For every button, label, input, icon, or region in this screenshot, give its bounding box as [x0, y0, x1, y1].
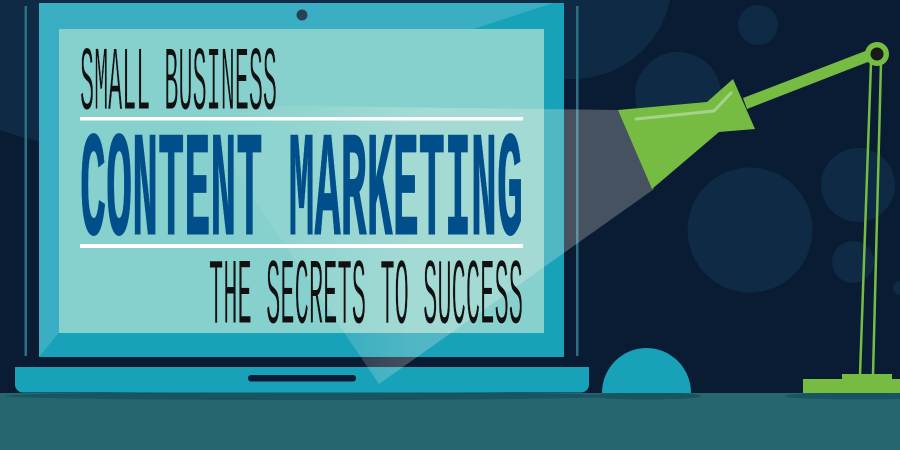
screen panel [59, 29, 544, 333]
lamp head highlight [636, 93, 731, 119]
desk dome [602, 348, 691, 393]
laptop screen bezel [39, 3, 564, 357]
lamp arm [743, 50, 873, 109]
divider top [80, 117, 523, 120]
desk [0, 393, 900, 450]
background circles [0, 0, 900, 295]
lamp legs [860, 62, 881, 375]
laptop lid side lines [24, 6, 578, 356]
screen glare on bezel [39, 3, 553, 357]
laptop [15, 3, 589, 393]
trackpad notch [248, 375, 356, 382]
desk lamp [618, 42, 900, 393]
divider bottom [80, 244, 523, 248]
desk shadows [5, 392, 900, 400]
lamp pivot [865, 42, 889, 66]
laptop base [15, 367, 589, 393]
lamp head [618, 79, 755, 189]
light beam [191, 106, 654, 384]
illustration: laptop and desk lamp banner: SMALL BUSINESS [80, 32, 277, 137]
lamp base [803, 374, 900, 393]
camera [296, 10, 308, 20]
